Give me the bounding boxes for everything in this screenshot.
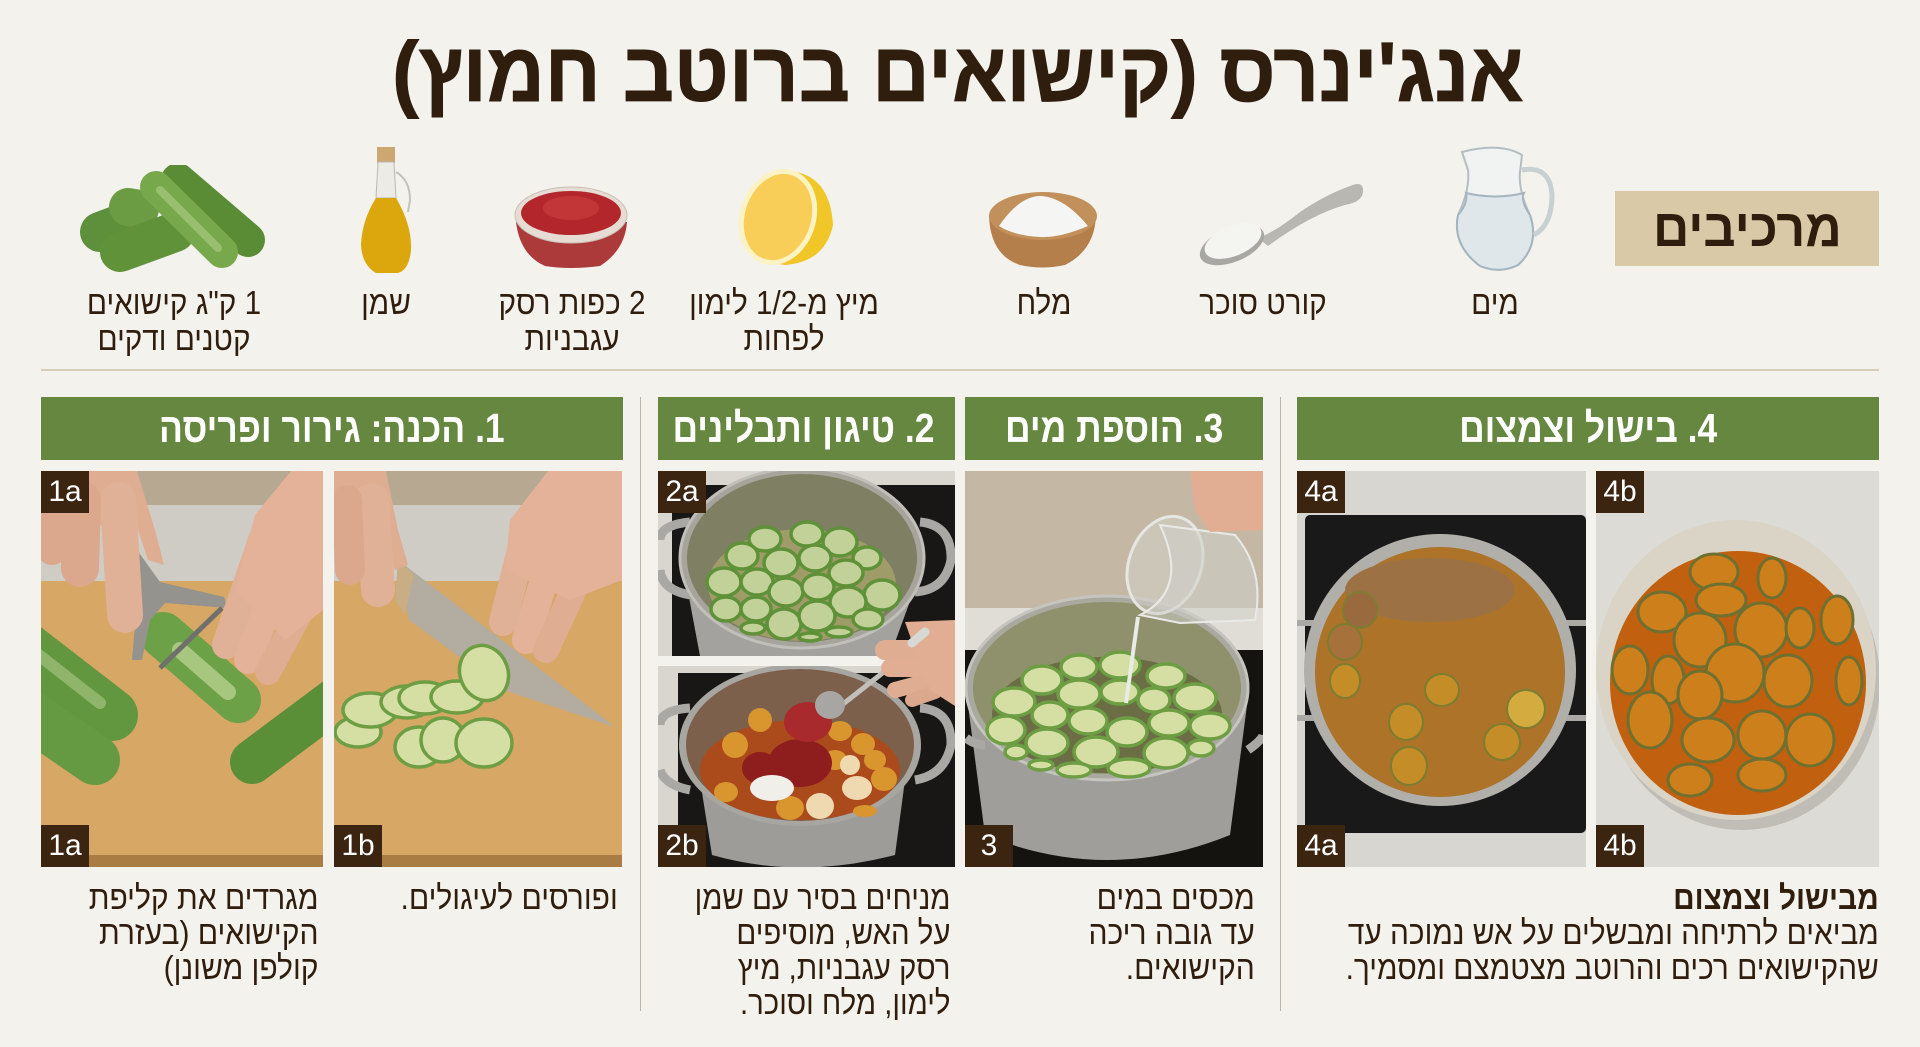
text: step 3: מכסים במים	[1097, 879, 1255, 916]
label: tomato paste: 2 כפות רסק	[499, 284, 645, 321]
tag 4a top	[1297, 471, 1345, 513]
label: pinch of sugar: קורט סוכר	[1199, 284, 1327, 321]
tag 1a top	[41, 471, 89, 513]
icon: oil bottle	[361, 147, 412, 273]
icon: zucchinis	[80, 165, 265, 272]
icon: water jug	[1456, 146, 1554, 271]
tag 4a bottom: 4a	[1304, 829, 1338, 862]
tag 2b: 2b	[665, 829, 699, 862]
step 3 header: 3. הוספת מים	[1005, 405, 1223, 451]
label: tomato paste: עגבניות	[524, 320, 620, 356]
text: step 1a	[88, 879, 318, 986]
text: step 2: לימון, מלח וסוכר.	[740, 984, 950, 1021]
text: step 3: הקישואים.	[1126, 949, 1255, 986]
label: zucchini: קטנים ודקים	[98, 320, 250, 356]
step 4 header: 4. בישול וצמצום	[1459, 405, 1717, 451]
tag 4b bottom: 4b	[1603, 829, 1637, 862]
text: step 2: רסק עגבניות, מיץ	[737, 949, 950, 986]
icon: sugar spoon	[1200, 184, 1363, 266]
tag 1a bottom: 1a	[48, 829, 82, 862]
tag 4a bottom	[1297, 825, 1345, 867]
text: step 4	[1346, 879, 1879, 986]
tag 4b bottom	[1596, 825, 1644, 867]
text: step 1a: הקישואים (בעזרת	[99, 914, 318, 951]
tag 1b	[334, 825, 382, 867]
text: step 2: מניחים בסיר עם שמן	[694, 879, 950, 916]
tag 3	[965, 825, 1013, 867]
photo 2b: adding seasoning	[658, 666, 955, 867]
label: salt: מלח	[1017, 284, 1071, 321]
hand with spoon over step 2 photos	[815, 620, 955, 719]
text: step 4: מבישול וצמצום	[1673, 879, 1879, 916]
tag 2b	[658, 825, 706, 867]
text: step 2: על האש, מוסיפים	[736, 914, 950, 951]
title: אנג'ינרס (קישואים ברוטב חמוץ)	[392, 25, 1524, 119]
tag 2a	[658, 471, 706, 513]
photo 4a: simmering pot	[1297, 471, 1586, 867]
photo 4b: finished dish	[1596, 471, 1879, 867]
tag 1b: 1b	[341, 829, 375, 862]
photo 2a: zucchini in pot	[658, 471, 955, 656]
label: oil: שמן	[361, 284, 411, 321]
tag 4b top: 4b	[1603, 475, 1637, 508]
step 1 header: 1. הכנה: גירור ופריסה	[159, 405, 505, 451]
photo 1a: peeling zucchini	[41, 471, 323, 867]
tag 2a: 2a	[665, 475, 699, 508]
tag 4a top: 4a	[1304, 475, 1338, 508]
text: step 3: עד גובה ריכה	[1089, 914, 1255, 951]
panel: ingredients heading	[1615, 191, 1879, 266]
label: lemon juice	[689, 284, 879, 356]
label: water: מים	[1471, 284, 1519, 321]
tag 4b top	[1596, 471, 1644, 513]
icon: lemon	[738, 169, 833, 265]
text: step 4: מביאים לרתיחה ומבשלים על אש נמוכה עד	[1348, 914, 1879, 951]
icon: salt bowl	[989, 192, 1097, 268]
label: zucchini	[87, 284, 261, 356]
label: tomato paste	[499, 284, 645, 356]
tag 1a top: 1a	[48, 475, 82, 508]
horizontal divider	[41, 369, 1879, 371]
tag 3: 3	[981, 829, 997, 862]
step 1 header	[41, 397, 623, 460]
label: zucchini: 1 ק"ג קישואים	[87, 284, 261, 321]
icon: tomato paste bowl	[514, 186, 628, 268]
photo 1b: slicing zucchini	[334, 471, 622, 867]
text: step 1a: מגרדים את קליפת	[88, 879, 318, 916]
step 2 header: 2. טיגון ותבלינים	[673, 405, 935, 451]
text: step 2	[694, 879, 950, 1021]
label: lemon juice: מיץ מ-1/2 לימון	[689, 284, 879, 321]
label: lemon juice: לפחות	[743, 320, 825, 356]
step 4 header	[1297, 397, 1879, 460]
text: step 4: שהקישואים רכים והרוטב מצטמצם ומסמיך.	[1346, 949, 1879, 986]
photo 3: adding water	[965, 471, 1263, 867]
step 2 header	[658, 397, 955, 460]
text: step 3	[1089, 879, 1255, 986]
text: step 1b: ופורסים לעיגולים.	[401, 879, 618, 916]
tag 1a bottom	[41, 825, 89, 867]
text: step 1a: קולפן משונן)	[163, 949, 318, 986]
step 3 header	[965, 397, 1263, 460]
panel: ingredients heading: מרכיבים	[1653, 199, 1841, 258]
